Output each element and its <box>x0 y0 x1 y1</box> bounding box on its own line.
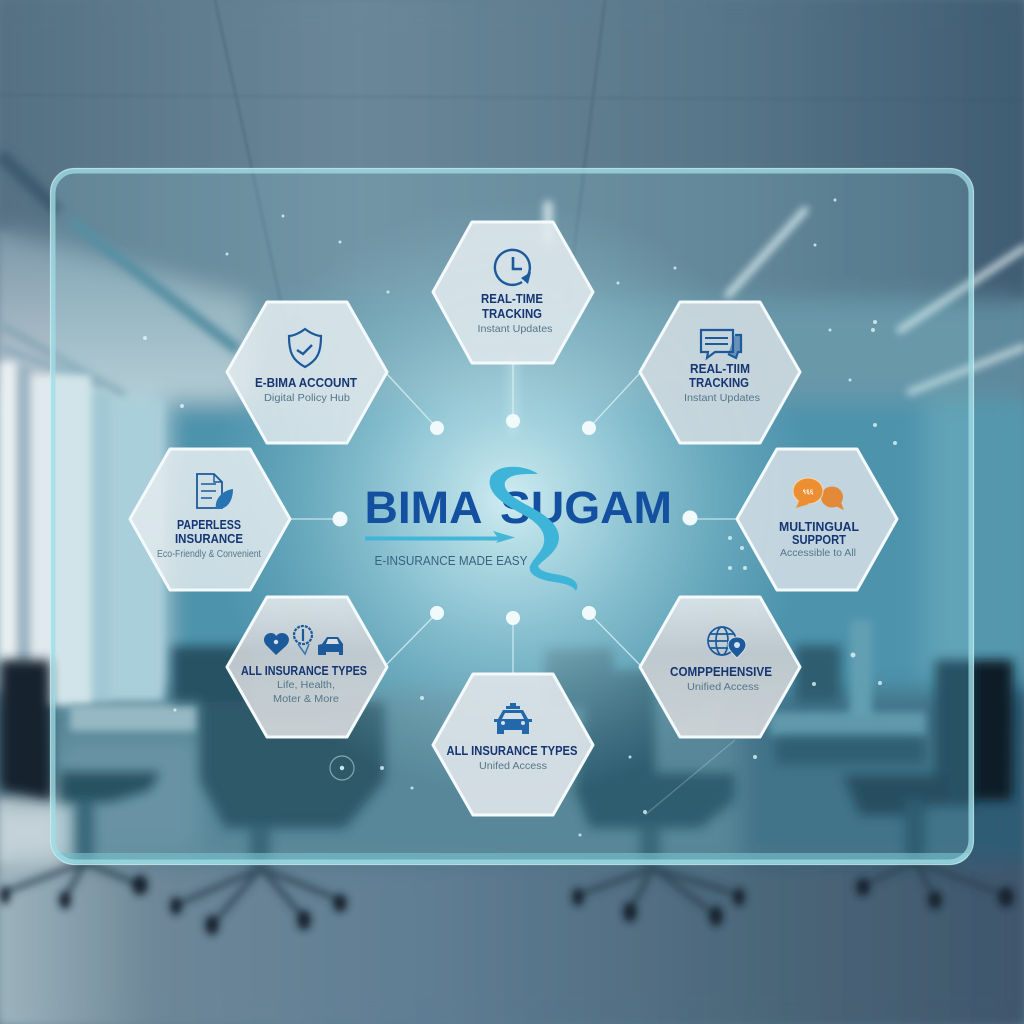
icon: clock <box>495 250 531 285</box>
text: all insurance types: Life, Health, <box>277 679 335 691</box>
logo: bima sugam <box>364 467 672 591</box>
text: e-bima account: Digital Policy Hub <box>264 392 350 404</box>
text: all insurance types: Moter & More <box>273 693 339 705</box>
ceiling lights <box>513 205 1024 430</box>
text: real-time tracking: TRACKING <box>482 307 542 321</box>
text: comprehensive: COMPPEHENSIVE <box>670 665 772 679</box>
text: multingual support: SUPPORT <box>792 533 846 547</box>
text: comprehensive: Unified Access <box>687 681 759 693</box>
glass panel <box>50 168 974 865</box>
icon: heart, gear and car <box>264 626 343 655</box>
icon: chat bubbles <box>701 330 741 358</box>
text: multingual support: Accessible to All <box>780 547 856 559</box>
wordmark: SUGAM <box>500 482 672 533</box>
window strips <box>0 362 163 705</box>
ring marker <box>330 756 354 780</box>
tables <box>70 620 926 736</box>
chairs <box>0 645 1013 865</box>
text: all insurance types unified access <box>446 744 578 772</box>
hexagon: e-bima account <box>227 302 387 443</box>
hexagon: paperless insurance <box>130 449 290 590</box>
hexagon: multingual support <box>737 449 897 590</box>
text: all insurance types unified access: Unifed Access <box>479 760 547 772</box>
icon: ambulance car <box>494 703 532 734</box>
wordmark <box>364 482 672 533</box>
text: real-tiim tracking: REAL-TIIM <box>690 362 750 376</box>
icon: orange speech bubbles: ९६६ <box>803 489 814 496</box>
text: comprehensive <box>670 665 772 693</box>
text: all insurance types <box>241 664 367 705</box>
text: real-time tracking: Instant Updates <box>478 323 552 335</box>
text: all insurance types: ALL INSURANCE TYPES <box>241 664 367 678</box>
ceiling beams <box>0 155 238 395</box>
text: paperless insurance: PAPERLESS <box>177 518 241 532</box>
text: multingual support <box>779 520 859 559</box>
text: real-tiim tracking <box>684 362 760 404</box>
text: real-time tracking <box>478 292 552 335</box>
arrow underline <box>365 531 515 543</box>
text: real-time tracking: REAL-TIME <box>481 292 543 306</box>
text: paperless insurance: INSURANCE <box>175 532 243 546</box>
hexagon: all insurance types bottom <box>433 674 593 815</box>
wordmark: BIMA <box>364 482 482 533</box>
hexagon: real-tiim tracking <box>640 302 800 443</box>
ceiling grid <box>0 0 1024 390</box>
text: e-bima account <box>255 376 357 404</box>
icon: document with leaf <box>197 474 233 509</box>
icon: orange speech bubbles <box>793 478 844 510</box>
connector lines <box>290 363 737 815</box>
hexagon: all insurance types left <box>227 597 387 737</box>
icon: shield <box>289 329 321 367</box>
connector nodes <box>332 414 698 625</box>
hexagon: real-time tracking <box>433 222 593 363</box>
text: all insurance types unified access: ALL INSURANCE TYPES <box>446 744 578 758</box>
text: real-tiim tracking: Instant Updates <box>684 392 760 404</box>
icon: globe with pin <box>708 627 746 658</box>
text: paperless insurance: Eco-Friendly & Convenient <box>157 548 261 560</box>
text: paperless insurance <box>157 518 261 560</box>
text: multingual support: MULTINGUAL <box>779 520 859 534</box>
tagline: E-INSURANCE MADE EASY <box>374 553 528 568</box>
particles <box>143 198 897 836</box>
text: real-tiim tracking: TRACKING <box>689 376 749 390</box>
hexagon: comprehensive <box>640 597 800 737</box>
swoosh S mark <box>490 467 577 591</box>
text: e-bima account: E-BIMA ACCOUNT <box>255 376 357 390</box>
chair legs and casters <box>0 862 1014 935</box>
